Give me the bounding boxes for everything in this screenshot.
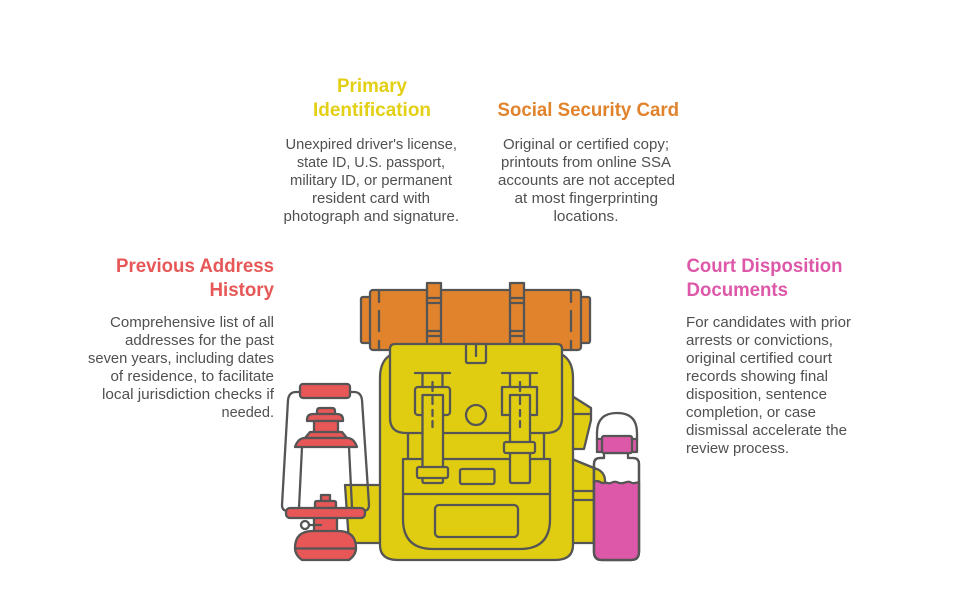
text: primary identification description: resident card with xyxy=(312,191,430,207)
panel: social security card xyxy=(498,99,679,225)
text: previous address description: needed. xyxy=(222,405,274,421)
icon: top flap xyxy=(390,344,562,433)
text: court disposition description: completion, or case xyxy=(686,405,816,421)
icon: bottle cap xyxy=(597,436,637,453)
icon: bottle body xyxy=(594,453,639,560)
text: previous address description: seven years, including dates xyxy=(88,351,274,367)
heading: court disposition documents xyxy=(686,255,842,301)
text: social security description: Original or certified copy; xyxy=(503,137,669,153)
icon: lantern fuel tank xyxy=(295,531,356,560)
text: primary identification description: state ID, U.S. passport, xyxy=(297,155,445,171)
icon: bottle water xyxy=(594,481,639,560)
panel: court disposition documents xyxy=(686,255,851,457)
text: previous address description: addresses for the past xyxy=(125,333,274,349)
heading: primary identification: Identification xyxy=(313,99,431,121)
text: previous address description: of residence, to facilitate xyxy=(110,369,274,385)
text: court disposition description: disposition, sentence xyxy=(686,387,827,403)
text: social security description xyxy=(498,137,675,225)
panel: primary identification xyxy=(284,75,459,225)
panel: previous address history xyxy=(88,255,274,421)
heading: court disposition documents: Court Disposition xyxy=(686,255,842,277)
text: previous address description: local jurisdiction checks if xyxy=(102,387,274,403)
icon: lantern handle grip xyxy=(300,384,350,398)
icon: lantern base plate xyxy=(286,508,365,518)
text: primary identification description xyxy=(284,137,459,225)
icon: lantern xyxy=(282,384,369,560)
text: social security description: printouts from online SSA xyxy=(501,155,671,171)
icon: water bottle xyxy=(594,413,639,560)
icon: backpack body xyxy=(380,354,573,560)
icon: backpack xyxy=(345,283,594,560)
heading: previous address history: Previous Address xyxy=(116,255,274,277)
heading: court disposition documents: Documents xyxy=(686,279,788,301)
icon: bottle outline xyxy=(594,458,639,560)
icon: left side pocket xyxy=(345,485,381,543)
text: social security description: at most fingerprinting xyxy=(514,191,658,207)
icon: bedroll xyxy=(361,283,590,350)
text: court disposition description: For candidates with prior xyxy=(686,315,851,331)
icon: front pocket xyxy=(403,459,550,549)
icon: left strap and buckle xyxy=(415,373,450,483)
icon: lantern wire handle xyxy=(282,392,369,511)
icon: right strap and buckle xyxy=(502,373,537,483)
icon: lantern glass xyxy=(299,447,352,508)
icon: flap tab xyxy=(466,344,486,363)
heading: previous address history: History xyxy=(210,279,274,301)
text: court disposition description: records showing final xyxy=(686,369,828,385)
text: court disposition description: dismissal accelerate the xyxy=(686,423,847,439)
text: previous address description xyxy=(88,315,274,421)
icon: bottle cap loop xyxy=(597,413,637,440)
text: court disposition description: original certified court xyxy=(686,351,832,367)
text: primary identification description: military ID, or permanent xyxy=(290,173,452,189)
icon: right side pockets xyxy=(572,396,594,543)
text: court disposition description: arrests or convictions, xyxy=(686,333,833,349)
icon: pocket shoulder over bottle xyxy=(594,468,605,483)
heading: social security card: Social Security Card xyxy=(498,99,679,121)
text: social security description: locations. xyxy=(554,209,618,225)
icon: lantern key xyxy=(301,521,321,529)
icon: flap button xyxy=(466,405,486,425)
heading: primary identification xyxy=(313,75,431,121)
text: primary identification description: photograph and signature. xyxy=(284,209,459,225)
icon: lantern burner xyxy=(314,495,337,532)
icon: connector lines xyxy=(408,433,544,459)
text: court disposition description xyxy=(686,315,851,457)
text: previous address description: Comprehensive list of all xyxy=(110,315,274,331)
text: social security description: accounts are not accepted xyxy=(498,173,675,189)
text: primary identification description: Unexpired driver's license, xyxy=(286,137,457,153)
heading: primary identification: Primary xyxy=(337,75,407,97)
text: court disposition description: review process. xyxy=(686,441,789,457)
heading: previous address history xyxy=(116,255,274,301)
icon: lantern hood xyxy=(295,408,357,447)
